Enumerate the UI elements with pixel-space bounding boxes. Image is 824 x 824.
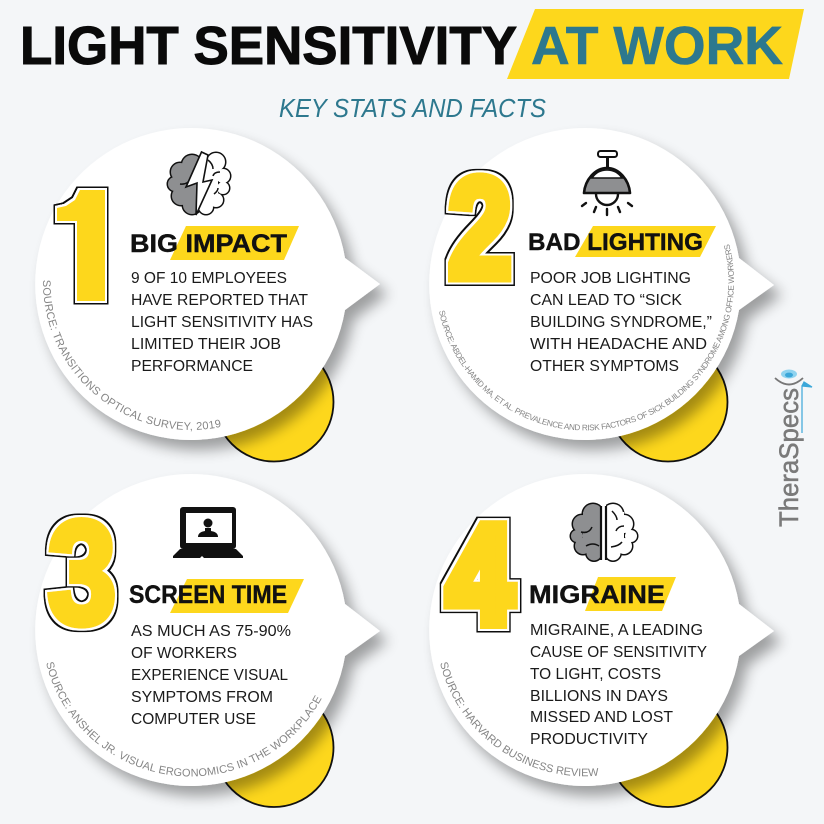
icon: brain: [571, 503, 637, 562]
heading band: [170, 226, 299, 260]
body text: [530, 622, 707, 748]
panel: big impact: [34, 128, 392, 462]
body text: OF WORKERS: [131, 645, 237, 662]
panel: screen time: [34, 474, 392, 808]
heading: BAD LIGHTING: [528, 229, 703, 256]
source: SOURCE: ANSHEL JR. VISUAL ERGONOMICS IN THE WORKPLACE: [46, 662, 322, 776]
body text: [530, 270, 712, 375]
body text: 9 OF 10 EMPLOYEES: [131, 270, 287, 287]
heading: BIG IMPACT: [130, 230, 287, 258]
source: SOURCE: TRANSITIONS OPTICAL SURVEY, 2019: [42, 280, 220, 432]
speech bubble: [429, 128, 774, 440]
body text: HAVE REPORTED THAT: [131, 292, 308, 309]
logo: TheraSpecs: [774, 370, 812, 527]
body text: [131, 623, 291, 728]
body text: EXPERIENCE VISUAL: [131, 667, 288, 684]
heading band: [575, 226, 716, 257]
speech bubble: [429, 474, 774, 786]
heading band: [170, 579, 304, 613]
body text: TO LIGHT, COSTS: [530, 666, 661, 683]
body text: WITH HEADACHE AND: [530, 336, 707, 353]
yellow disc: [608, 342, 728, 462]
yellow disc: [608, 688, 728, 807]
body text: MIGRAINE, A LEADING: [530, 622, 703, 639]
heading: MIGRAINE: [529, 581, 665, 609]
title text: light sensitivity: LIGHT SENSITIVITY: [20, 16, 517, 76]
body text: LIMITED THEIR JOB: [131, 336, 281, 353]
panel: migraine: [428, 474, 786, 808]
body text: COMPUTER USE: [131, 711, 256, 728]
body text: CAN LEAD TO “SICK: [530, 292, 682, 309]
body text: MISSED AND LOST: [530, 709, 673, 726]
title band: [507, 9, 804, 79]
body text: [131, 270, 313, 375]
title text: at work: AT WORK: [531, 16, 783, 76]
body text: OTHER SYMPTOMS: [530, 358, 679, 375]
source: SOURCE: HARVARD BUSINESS REVIEW: [440, 662, 598, 776]
body text: PRODUCTIVITY: [530, 731, 648, 748]
heading: SCREEN TIME: [129, 581, 287, 609]
body text: LIGHT SENSITIVITY HAS: [131, 314, 313, 331]
yellow disc: [214, 342, 334, 462]
body text: SYMPTOMS FROM: [131, 689, 273, 706]
speech bubble: [35, 474, 380, 786]
heading band: [585, 577, 676, 611]
body text: AS MUCH AS 75-90%: [131, 623, 291, 640]
body text: PERFORMANCE: [131, 358, 253, 375]
speech bubble: [35, 128, 380, 440]
source: SOURCE: ABDEL-HAMID MA, ET AL. PREVALENCE AND RISK FACTORS OF SICK BUILDING SYNDROME AMONG OFFICE WORKERS: [439, 244, 734, 430]
logo text: TheraSpecs: [774, 388, 804, 527]
title: [20, 9, 804, 79]
logo eye: [781, 370, 797, 378]
number 4: 4: [447, 498, 513, 652]
logo arc: [775, 378, 803, 384]
body text: CAUSE OF SENSITIVITY: [530, 644, 707, 661]
body text: BILLIONS IN DAYS: [530, 688, 668, 705]
body text: BUILDING SYNDROME,”: [530, 314, 712, 331]
icon: ceiling lamp: [582, 151, 632, 215]
logo arrow: [802, 382, 812, 433]
icon: laptop: [173, 507, 243, 558]
body text: POOR JOB LIGHTING: [530, 270, 691, 287]
number 3: 3: [48, 491, 116, 654]
panel: bad lighting: [428, 128, 786, 462]
number 2: 2: [448, 150, 512, 308]
number 1: 1: [35, 147, 129, 337]
icon: brain with lightning: [168, 152, 230, 215]
yellow disc: [214, 688, 334, 807]
subtitle: KEY STATS AND FACTS: [279, 93, 547, 123]
